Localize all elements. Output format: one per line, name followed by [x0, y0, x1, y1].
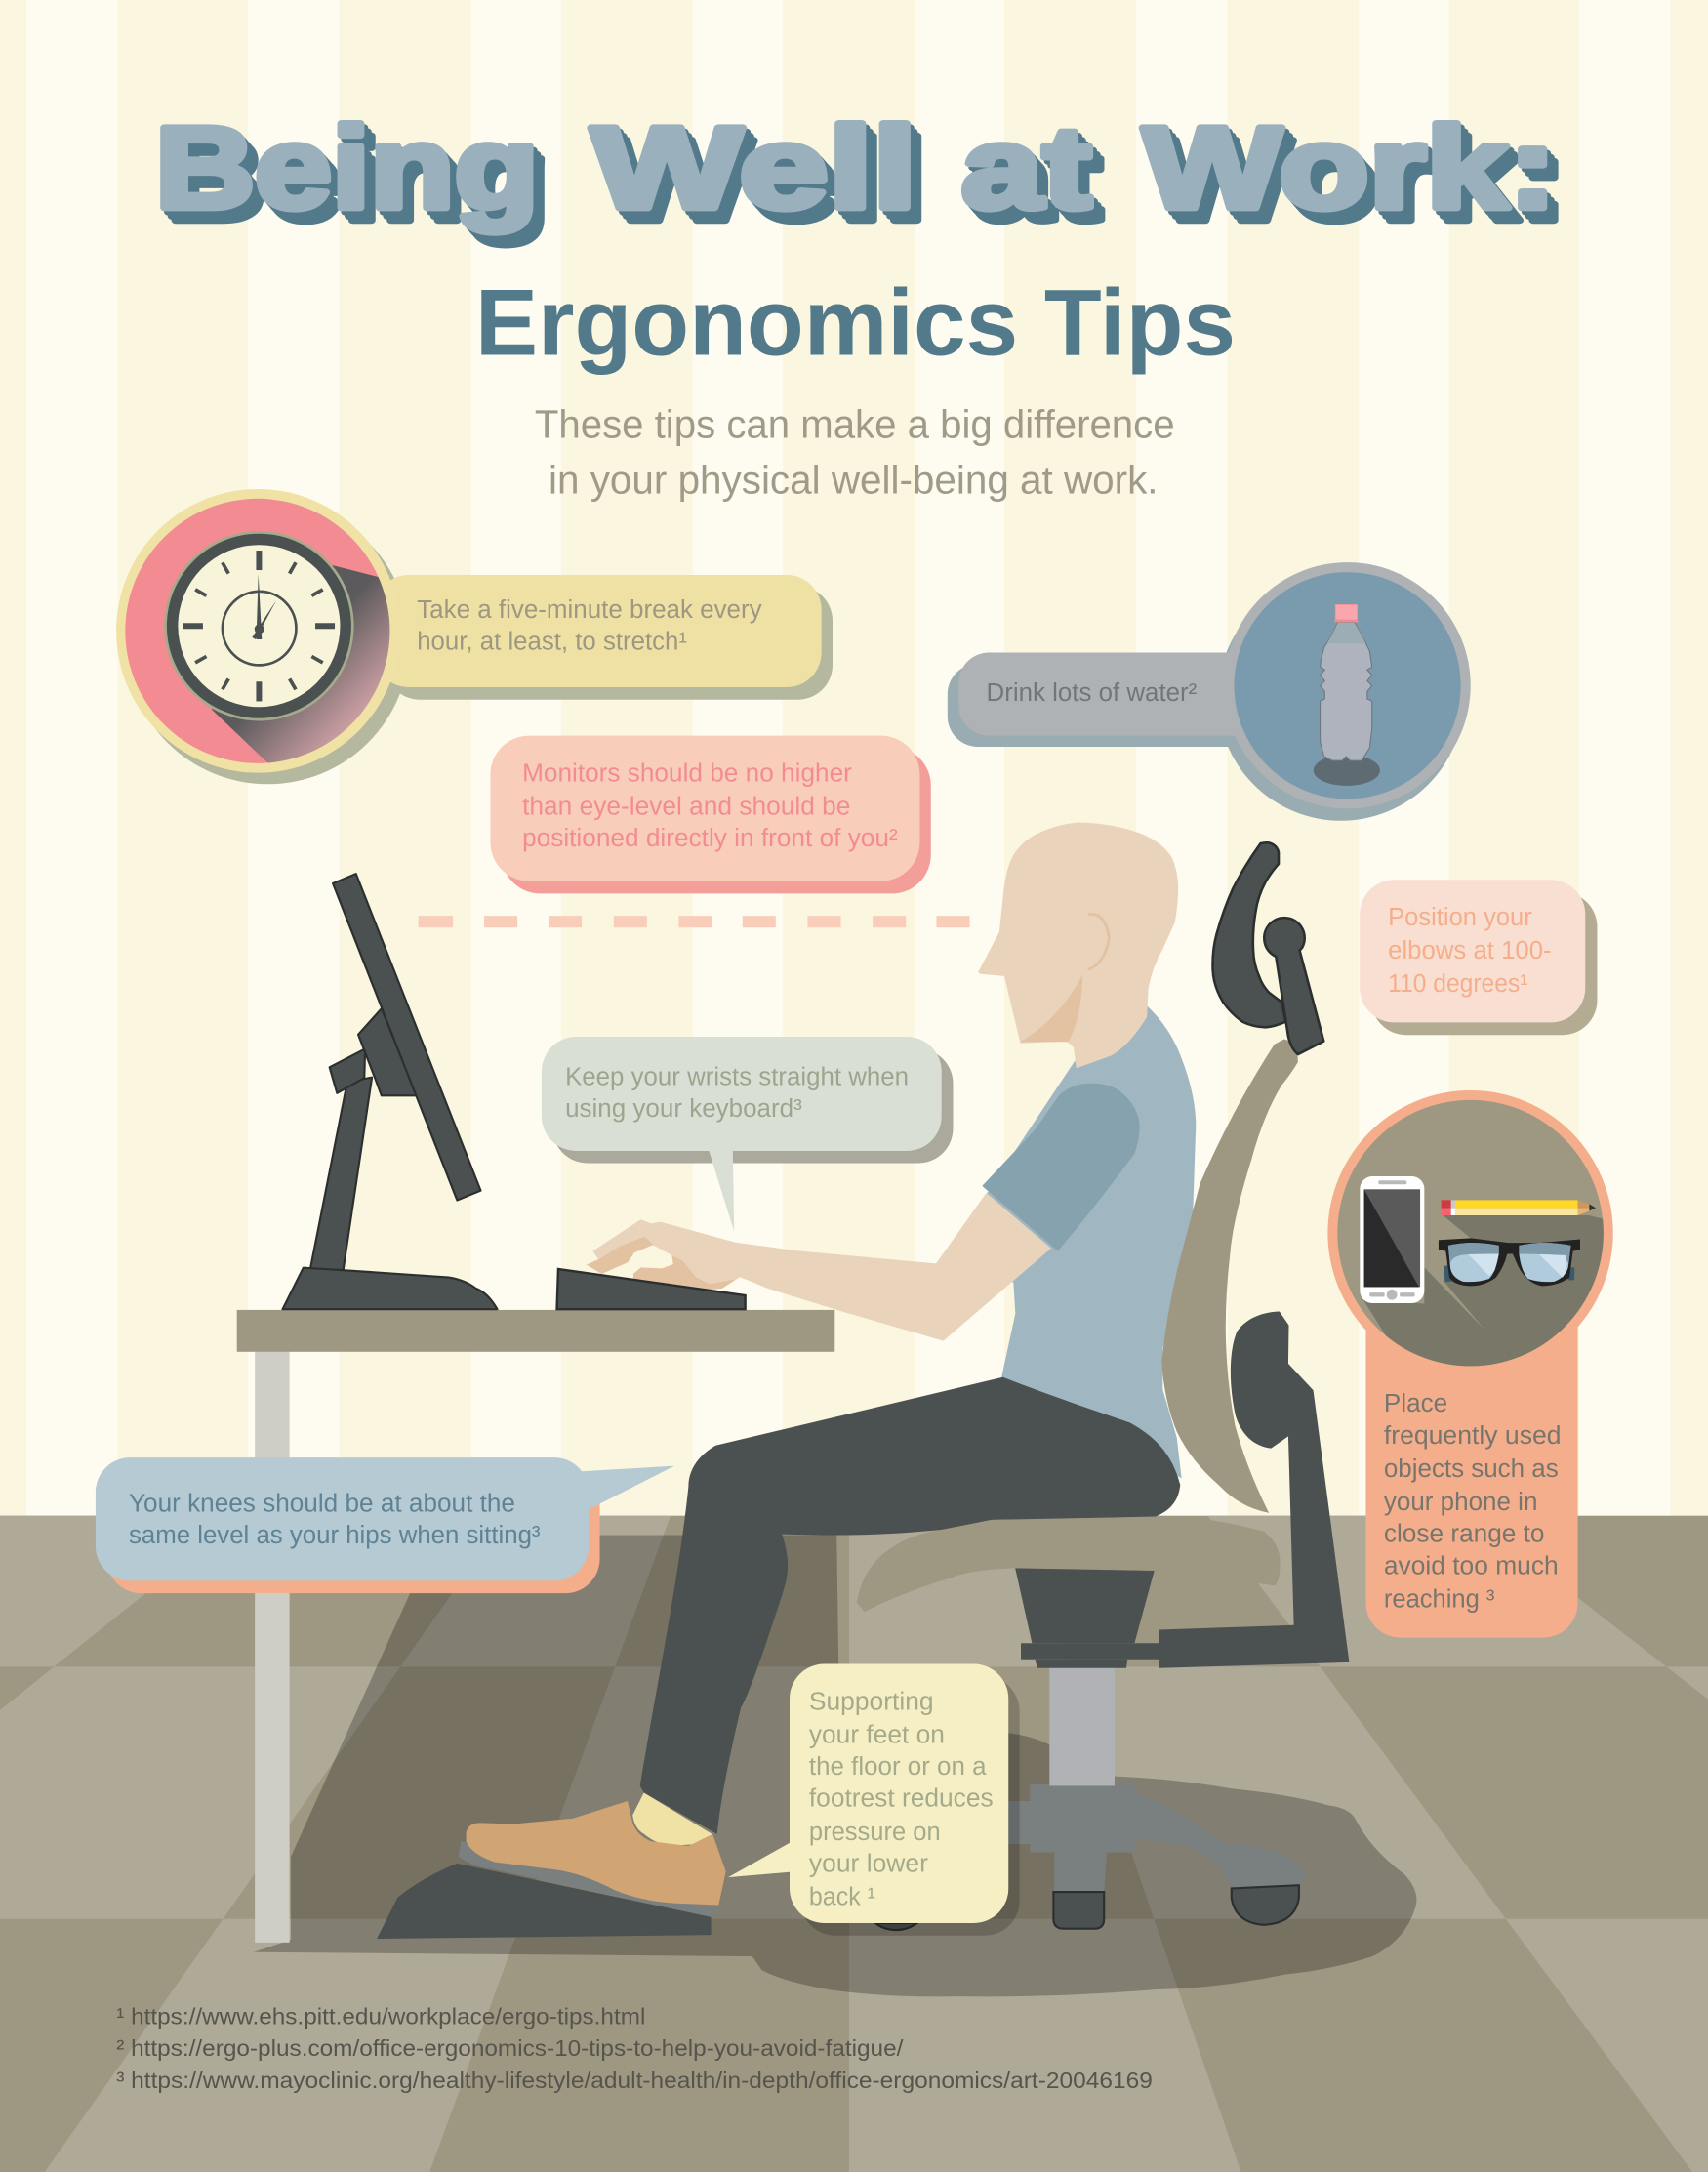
chair headrest — [1213, 842, 1323, 1054]
elbows text: Position your — [1388, 902, 1532, 931]
break callout shadow — [386, 586, 833, 700]
title: Being — [155, 103, 539, 233]
objects ring — [1327, 1090, 1613, 1375]
panel: feet tip — [728, 1664, 1020, 1936]
keyboard — [557, 1269, 746, 1309]
shoe sole — [459, 1841, 718, 1917]
footnotes — [116, 2004, 1153, 2093]
pink disc — [125, 499, 389, 763]
icon: water bottle — [1321, 604, 1372, 760]
desk leg — [255, 1351, 290, 1943]
water callout — [958, 652, 1278, 736]
break text: hour, at least, to stretch¹ — [417, 627, 687, 656]
dashed eye-level line — [419, 916, 970, 927]
break text: Take a five-minute break every — [417, 594, 762, 624]
monitor text: Monitors should be no higher — [522, 758, 852, 787]
wrists text: using your keyboard³ — [565, 1093, 802, 1123]
monitor callout — [490, 736, 919, 881]
wrists callout tail — [709, 1150, 734, 1232]
objects text: reaching ³ — [1384, 1583, 1495, 1613]
knees text: same level as your hips when sitting³ — [129, 1520, 541, 1549]
break callout — [374, 575, 822, 687]
wrists text: Keep your wrists straight when — [565, 1061, 909, 1090]
clock disc — [116, 489, 400, 773]
footnotes: ³ https://www.mayoclinic.org/healthy-lifestyle/adult-health/in-depth/office-ergonomics/art-20046169 — [116, 2068, 1153, 2093]
title: at — [961, 103, 1091, 233]
title: Being — [162, 111, 547, 241]
man: ear — [1088, 914, 1109, 969]
objects text: objects such as — [1384, 1454, 1559, 1483]
feet text: pressure on — [809, 1817, 941, 1846]
break text — [417, 594, 762, 656]
monitor text — [522, 758, 898, 852]
computer monitor — [283, 874, 498, 1309]
title — [155, 103, 1568, 246]
objects callout — [1365, 1247, 1578, 1638]
feet callout — [790, 1664, 1008, 1923]
icon: pencil — [1442, 1200, 1596, 1215]
feet text — [809, 1686, 994, 1911]
title: Work: — [1150, 111, 1565, 241]
panel: wrists tip — [542, 1037, 953, 1232]
chair seat pedestal — [1015, 1567, 1159, 1668]
elbows callout shadow — [1371, 892, 1597, 1035]
title: at — [972, 116, 1103, 246]
wrists callout shadow — [552, 1048, 953, 1163]
man: shirt torso — [970, 1005, 1196, 1478]
feet callout shadow — [800, 1676, 1020, 1936]
monitor callout shadow — [502, 747, 931, 893]
sock — [632, 1793, 712, 1845]
knees text: Your knees should be at about the — [129, 1488, 515, 1517]
man: head and neck — [978, 822, 1178, 1068]
intro text — [535, 401, 1175, 502]
title: at — [969, 111, 1099, 241]
objects text: close range to — [1384, 1519, 1545, 1548]
man: jaw shadow — [1020, 975, 1082, 1042]
title: Well — [602, 116, 928, 246]
icon: bottle shadow — [1314, 755, 1380, 786]
man: finger shadows — [587, 1237, 737, 1291]
water disc inner — [1234, 572, 1461, 799]
objects text: frequently used — [1384, 1420, 1562, 1450]
elbows text: elbows at 100- — [1388, 935, 1552, 964]
objects text — [1384, 1388, 1562, 1613]
title: Being — [166, 116, 549, 246]
man: forearm and hand — [592, 1193, 1051, 1341]
water callout shadow — [948, 664, 1266, 747]
feet text: footrest reduces — [809, 1783, 994, 1813]
knees callout shadow — [106, 1470, 600, 1593]
icon: glasses — [1439, 1238, 1580, 1286]
title: Well — [599, 111, 924, 241]
water disc — [1224, 562, 1471, 808]
desk top — [237, 1310, 834, 1352]
checkered floor — [0, 1516, 1708, 2172]
intro text: in your physical well-being at work. — [549, 457, 1159, 502]
water disc shadow — [1218, 574, 1464, 821]
monitor text: than eye-level and should be — [522, 792, 850, 821]
chair back support and armrest pad — [1159, 1311, 1349, 1668]
chair seat — [857, 1517, 1281, 1612]
footnotes: ¹ https://www.ehs.pitt.edu/workplace/ergo-tips.html — [116, 2004, 645, 2029]
chair wheels — [875, 1885, 1299, 1930]
objects text: your phone in — [1384, 1487, 1537, 1516]
wrists callout — [542, 1037, 942, 1151]
feet text: your lower — [809, 1848, 928, 1877]
objects text: Place — [1384, 1388, 1447, 1417]
wrists text — [565, 1061, 909, 1123]
objects long shadow — [1362, 1215, 1604, 1367]
chair backrest — [1161, 1039, 1298, 1513]
title: Well — [591, 103, 917, 233]
water text: Drink lots of water² — [987, 677, 1198, 707]
subtitle: Ergonomics Tips — [475, 270, 1236, 375]
panel: take a break — [116, 489, 833, 784]
clock disc shadow — [126, 501, 410, 784]
feet text: Supporting — [809, 1686, 934, 1715]
intro text: These tips can make a big difference — [535, 401, 1175, 446]
title: Being — [159, 107, 543, 237]
elbows callout — [1360, 880, 1585, 1022]
knees callout — [96, 1457, 589, 1580]
icon: phone — [1360, 1176, 1424, 1303]
icon: clock — [164, 531, 354, 720]
clock long shadow — [211, 565, 390, 763]
office chair — [875, 1311, 1349, 1930]
panel: frequently used objects — [1327, 1090, 1621, 1638]
elbows text — [1388, 902, 1552, 998]
footnotes: ² https://ergo-plus.com/office-ergonomics-10-tips-to-help-you-avoid-fatigue/ — [116, 2035, 904, 2061]
panel: monitor tip — [490, 736, 931, 893]
desk and chair floor shadow — [254, 1536, 1416, 1996]
man: trousers — [640, 1377, 1180, 1834]
title: Work: — [1143, 103, 1557, 233]
knees text — [129, 1488, 541, 1549]
title: Well — [595, 107, 920, 237]
monitor text: positioned directly in front of you² — [522, 823, 898, 852]
elbows text: 110 degrees¹ — [1388, 968, 1528, 998]
feet text: your feet on — [809, 1719, 945, 1748]
panel: drink water — [948, 562, 1471, 821]
chair column — [1049, 1662, 1115, 1785]
feet text: the floor or on a — [809, 1751, 987, 1781]
title: at — [965, 107, 1095, 237]
title: Work: — [1154, 116, 1568, 246]
panel: elbows tip — [1360, 880, 1597, 1035]
feet callout tail — [728, 1841, 793, 1877]
panel: knees tip — [96, 1457, 674, 1593]
knees callout tail — [582, 1466, 674, 1513]
shoe — [467, 1801, 726, 1906]
feet text: back ¹ — [809, 1882, 875, 1911]
objects text: avoid too much — [1384, 1550, 1559, 1579]
title: Work: — [1147, 107, 1561, 237]
footrest — [377, 1864, 712, 1939]
objects disc — [1337, 1100, 1604, 1366]
man: shirt sleeve — [982, 1084, 1140, 1251]
chair base — [1007, 1784, 1305, 1893]
